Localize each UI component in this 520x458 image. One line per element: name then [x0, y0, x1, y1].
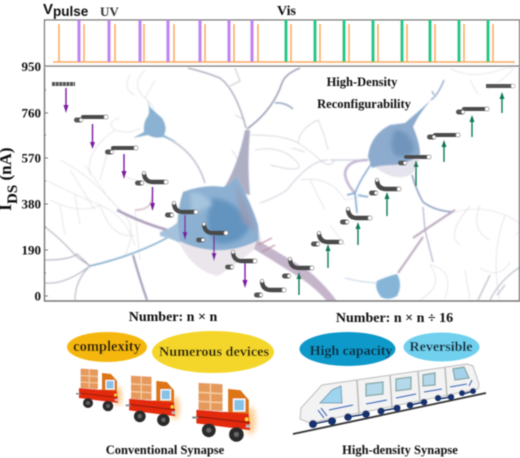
caption: high-density synapse: High-density Synapse — [342, 443, 458, 457]
caption: conventional synapse: Conventional Synapse — [106, 443, 225, 457]
icon: train — [293, 364, 486, 434]
heading: Vpulse label: pulse — [53, 4, 89, 19]
thick axon lower right — [254, 240, 337, 301]
label: UV: UV — [100, 4, 119, 19]
grey-blue dendrites, left lower — [45, 227, 520, 300]
devices with green up arrows — [282, 84, 515, 295]
y-axis tick labels: 570 — [22, 150, 41, 166]
mauve arc — [345, 160, 368, 193]
plot title — [317, 75, 412, 111]
orange pulses — [53, 24, 515, 62]
thin dendrites near the large soma apex — [232, 115, 335, 169]
heading: high-density count: Number: n × n ÷ 16 — [336, 311, 453, 326]
top panel: voltage pulses — [44, 20, 520, 66]
right soma pale underside — [368, 123, 420, 177]
purple UV pulses — [79, 20, 252, 62]
heading: Vpulse label: V — [43, 1, 53, 18]
small bottom soma — [376, 274, 400, 299]
bubble: high capacity: High capacity — [310, 344, 392, 359]
right soma blue body — [368, 100, 431, 168]
branches from small soma to large soma — [163, 136, 205, 183]
y-axis tick labels: 760 — [22, 106, 41, 120]
lower right connecting axon — [413, 210, 455, 238]
right soma neck — [412, 175, 453, 212]
icon: red trucks — [76, 368, 256, 442]
bubble: complexity — [67, 332, 147, 362]
bubble: complexity: complexity — [73, 339, 142, 355]
y-axis tick labels: 380 — [22, 196, 41, 212]
main plot frame — [44, 67, 520, 301]
y-axis tick labels: 950 — [22, 59, 41, 74]
bubble: reversible: Reversible — [410, 340, 472, 355]
blue descending branch — [347, 163, 372, 213]
left axon from large soma — [90, 238, 167, 266]
pale fine dendrites — [46, 68, 520, 300]
label: Vis: Vis — [277, 4, 296, 19]
y-axis tick labels: 0 — [34, 288, 41, 304]
green visible pulses — [286, 20, 488, 62]
y-axis title: DS — [5, 185, 21, 204]
bubble: numerous devices: Numerous devices — [159, 345, 270, 360]
bubble: reversible — [404, 332, 480, 362]
apical branches — [188, 68, 246, 128]
apical trunk — [224, 130, 250, 195]
devices with purple down arrows — [52, 84, 286, 298]
bubble: numerous devices — [152, 331, 274, 373]
y-axis ticks — [44, 90, 48, 296]
heading: conventional count: Number: n × n — [129, 310, 217, 325]
neuron illustration background — [45, 68, 520, 301]
large soma pale underside — [177, 176, 262, 276]
plot title: Reconfigurability — [317, 97, 412, 111]
y-axis tick labels: 190 — [22, 242, 41, 258]
plot title: High-Density — [327, 75, 398, 89]
large soma blue body — [178, 176, 259, 250]
y-axis tick labels — [22, 59, 41, 304]
small top-left soma — [133, 97, 177, 142]
bubble: high capacity — [300, 332, 396, 366]
